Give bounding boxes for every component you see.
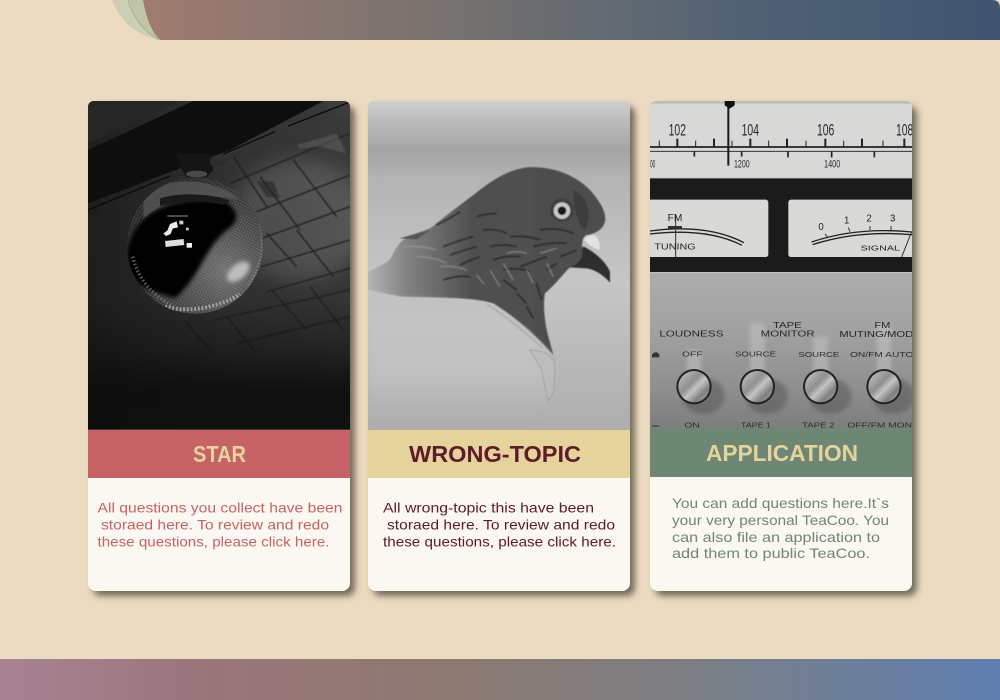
pigeon eye [550, 198, 574, 222]
control panel: TAPE 2 [802, 420, 835, 429]
disco ball mount [181, 157, 214, 178]
pigeon beak [570, 235, 610, 283]
tuning meter [643, 200, 768, 257]
control panel: OFF [682, 350, 703, 359]
control panel: SOURCE [798, 350, 839, 359]
panel: application [643, 101, 918, 591]
control panel: FM [874, 320, 890, 330]
knob: tape 1 [740, 369, 788, 414]
tuning meter: FM [668, 213, 682, 224]
control panel: MUTING/MOD [839, 329, 913, 339]
pigeon feathers [403, 190, 589, 318]
banner: wrong-topic [368, 430, 630, 478]
text block: star description: All questions you collect have been [98, 500, 342, 516]
control panel: OFF/FM MON [847, 420, 912, 429]
control panel: TAPE 1 [741, 420, 771, 429]
signal meter: 3 [890, 213, 895, 224]
text block: star description: these questions, please click here. [98, 534, 330, 550]
knob: loudness [676, 369, 725, 414]
signal meter [788, 200, 918, 257]
banner: application [650, 428, 912, 477]
tuning meter: TUNING [654, 241, 696, 251]
control panel: SOURCE [735, 350, 776, 359]
signal meter: 1 [844, 216, 849, 227]
knob: tape 2 [803, 369, 851, 414]
heading: application: APPLICATION [706, 440, 858, 466]
tuning scale: 1200 [734, 159, 750, 171]
signal meter: SIGNAL [861, 243, 900, 252]
text block: application description [672, 495, 889, 561]
top gradient bar [143, 0, 1000, 40]
text block: application description: add them to public TeaCoo. [672, 545, 870, 561]
signal meter: 0 [818, 222, 824, 233]
heading: wrong-topic: WRONG-TOPIC [409, 441, 581, 467]
decorative leaves top left [112, 0, 159, 40]
text block: wrong-topic description: All wrong-topic this have been [383, 500, 594, 516]
control panel: LOUDNESS [659, 328, 724, 338]
control panel: MONITOR [761, 329, 815, 339]
control panel: ON [684, 420, 700, 429]
heading: star: STAR [193, 441, 246, 467]
signal meter: 2 [866, 213, 872, 224]
photo: radio receiver [643, 101, 918, 430]
photo: disco ball [88, 101, 370, 430]
pigeon body [370, 296, 551, 379]
panel: star [88, 101, 370, 591]
control panel [650, 272, 915, 429]
tuning scale: 108 [896, 120, 913, 139]
control panel: TAPE [773, 320, 802, 330]
pigeon head and neck [368, 167, 605, 355]
text block: wrong-topic description: storaed here. To review and redo [387, 516, 615, 532]
tuning scale: 1400 [824, 159, 840, 171]
text block: star description: storaed here. To review and redo [101, 516, 329, 532]
tuning scale: 106 [817, 120, 834, 139]
text block: application description: your very personal TeaCoo. You [672, 512, 889, 528]
text block: wrong-topic description [383, 500, 616, 550]
control panel: ON/FM AUTO [850, 350, 914, 359]
tuning scale: 102 [669, 120, 686, 139]
bottom gradient bar [0, 659, 1000, 700]
text block: star description [98, 500, 342, 550]
panel: wrong-topic [368, 101, 630, 591]
banner: star [88, 430, 350, 478]
text block: application description: can also file an application to [672, 529, 880, 545]
text block: application description: You can add questions here.It`s [672, 495, 889, 511]
disco ball [126, 177, 263, 314]
photo: pigeon [368, 101, 630, 430]
text block: wrong-topic description: these questions, please click here. [383, 534, 616, 550]
knob: fm muting [866, 369, 915, 414]
tuning scale: 00 [650, 159, 655, 171]
tuning scale: 104 [742, 120, 759, 139]
tuning scale [650, 101, 912, 168]
